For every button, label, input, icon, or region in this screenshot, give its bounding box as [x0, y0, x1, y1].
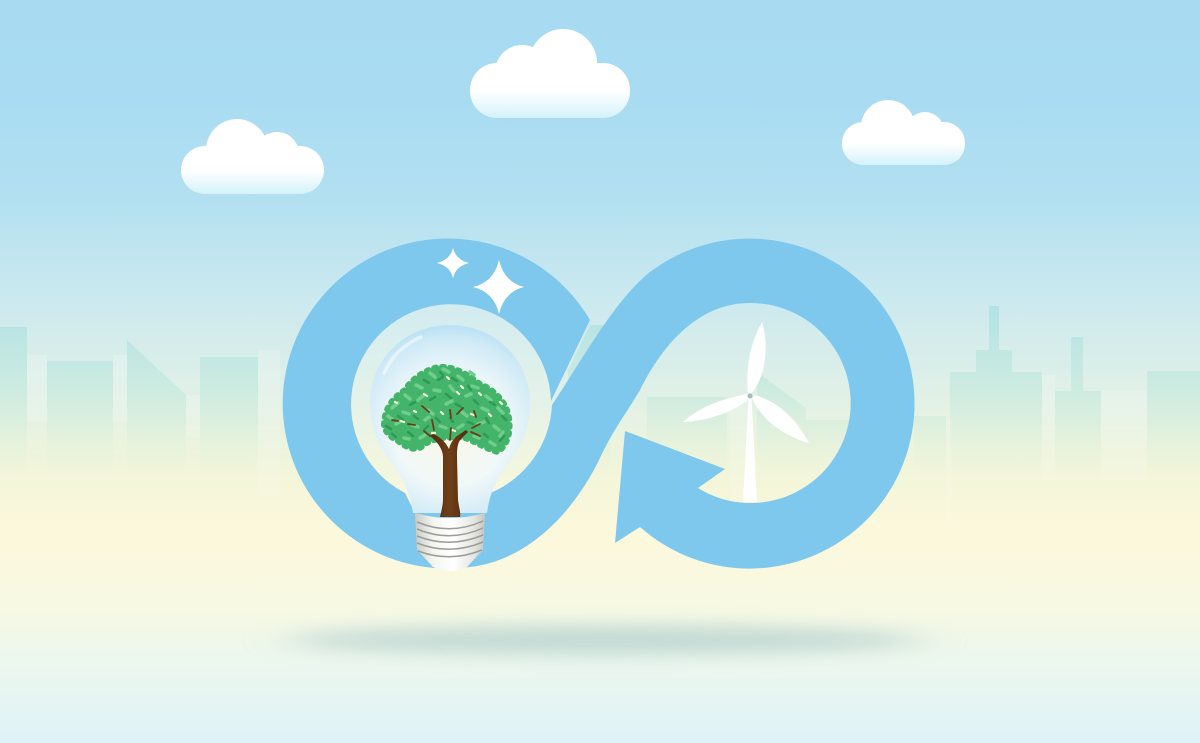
bulb screw base	[415, 513, 485, 571]
cloud: left	[181, 119, 324, 194]
glass highlight	[384, 337, 421, 373]
bulb glass	[370, 325, 530, 513]
tree crown	[384, 367, 510, 452]
bulb halo	[351, 304, 551, 493]
cloud: right	[842, 100, 965, 165]
ground shadow	[285, 625, 925, 655]
cloud: top centre	[470, 29, 630, 118]
city skyline	[0, 306, 1200, 530]
infinity arrow loop	[283, 239, 915, 569]
light bulb with tree	[351, 304, 551, 571]
icon: wind turbine	[683, 322, 809, 502]
icon: sparkles	[437, 248, 524, 314]
tree trunk and branches	[392, 406, 480, 517]
